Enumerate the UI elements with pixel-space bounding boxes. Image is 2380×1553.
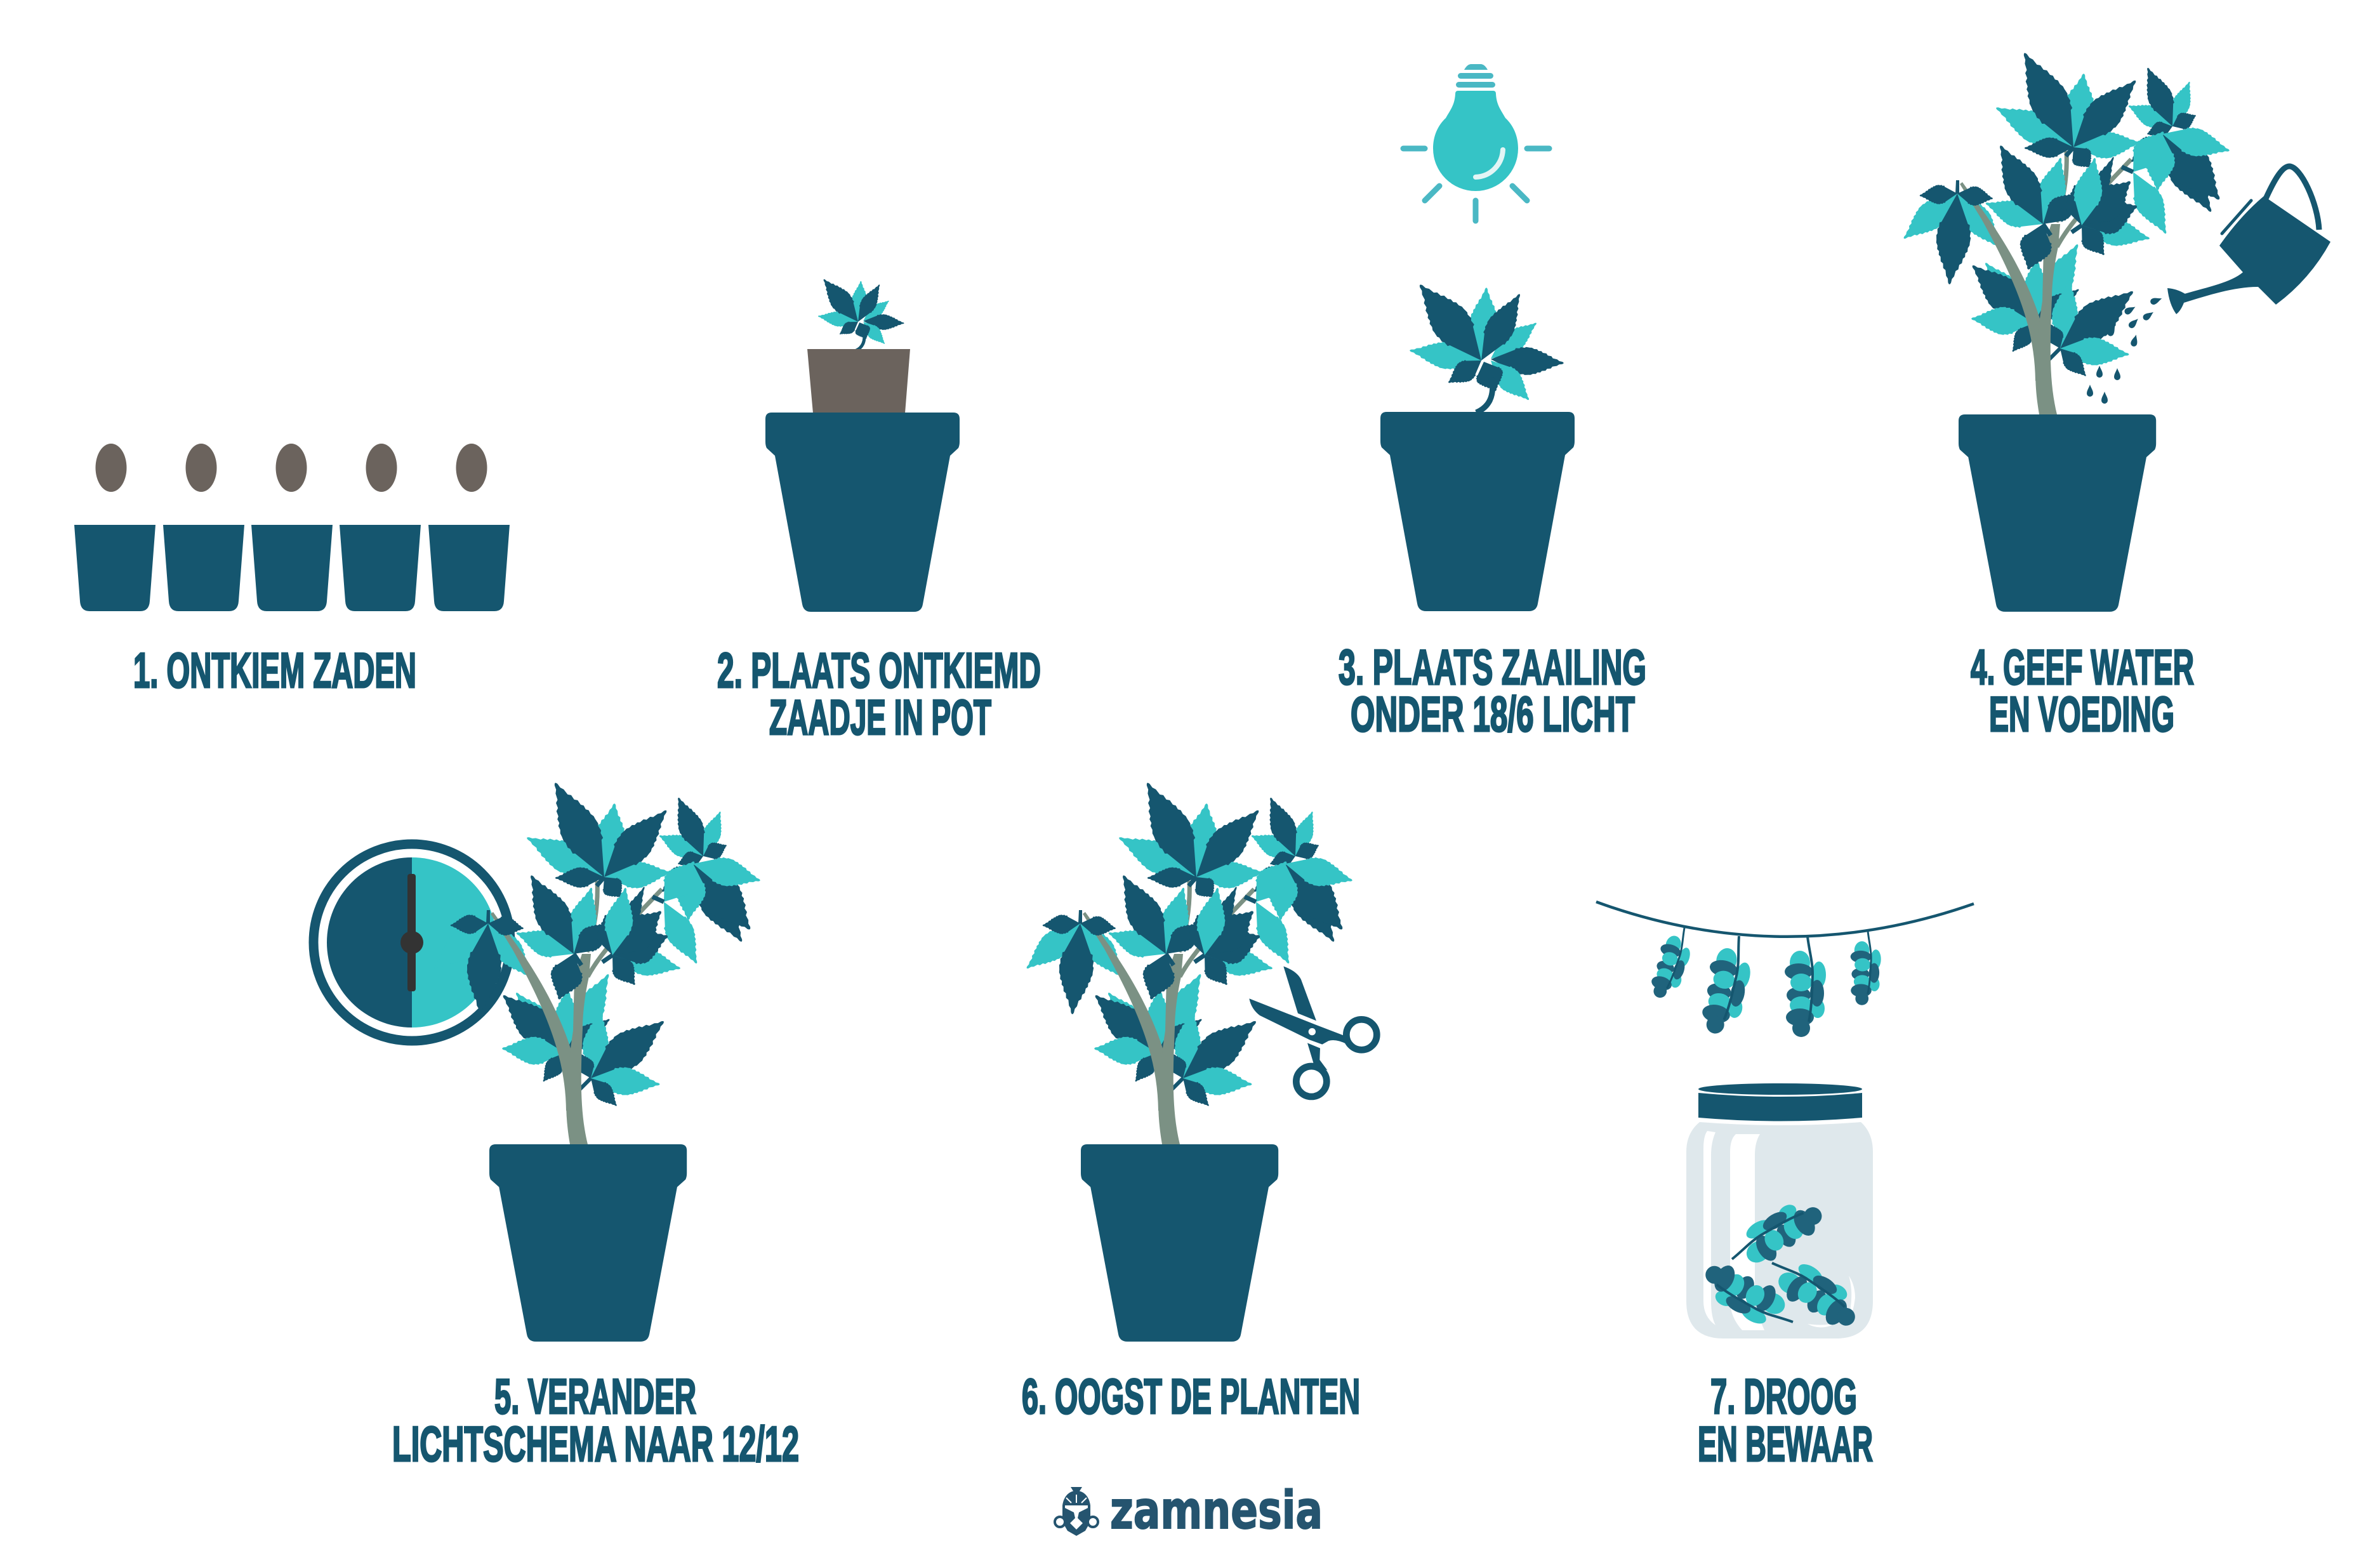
label step 5: LICHTSCHEMA NAAR 12/12: [392, 1416, 799, 1472]
wordmark: zamnesia: [1110, 1481, 1323, 1541]
jar: [1686, 1083, 1873, 1338]
large pot: [765, 413, 960, 612]
seedling: [816, 272, 904, 351]
water drops: [2087, 296, 2163, 404]
label step 3: 3. PLAATS ZAAILING: [1339, 639, 1646, 695]
jar highlights: [1703, 1131, 1855, 1330]
label step 5: 5. VERANDER: [494, 1368, 696, 1424]
buds in jar: [1695, 1191, 1867, 1338]
jar lid: [1698, 1083, 1862, 1095]
step 5: change light schedule: [314, 774, 765, 1342]
label step 6: 6. OOGST DE PLANTEN: [1022, 1368, 1360, 1424]
icon: timer clock: [314, 844, 510, 1041]
pot: [489, 1144, 687, 1342]
plant: [426, 774, 765, 1144]
seedling: [1405, 272, 1564, 413]
step 4: water and feed: [1895, 44, 2330, 612]
logo: zamnesia: [1055, 1481, 1323, 1541]
icon: mask: [1055, 1487, 1098, 1536]
label step 7: [1698, 1368, 1873, 1472]
icon: watering can: [2167, 166, 2330, 314]
label step 3: ONDER 18/6 LICHT: [1351, 686, 1635, 742]
seeds: [95, 444, 487, 492]
pot: [1081, 1144, 1278, 1342]
icon: light bulb: [1403, 64, 1549, 221]
step 7: dry and store: [1596, 902, 1974, 1338]
icon: scissors: [1249, 967, 1377, 1097]
plant: [1018, 774, 1358, 1144]
label step 2: ZAADJE IN POT: [769, 689, 991, 745]
cups: [74, 525, 510, 611]
label step 4: EN VOEDING: [1989, 686, 2174, 742]
pot: [1959, 414, 2156, 612]
pot: [1380, 412, 1575, 611]
step 1: seeds and cups: [74, 444, 510, 611]
drying line: [1596, 902, 1974, 937]
label step 2: [717, 642, 1041, 745]
label step 7: EN BEWAAR: [1698, 1416, 1873, 1472]
step 6: harvest: [1018, 774, 1377, 1342]
small brown pot: [807, 349, 910, 413]
label step 2: 2. PLAATS ONTKIEMD: [717, 642, 1041, 698]
step 3: seedling under 18/6 light: [1380, 64, 1575, 611]
jar glass: [1686, 1122, 1873, 1338]
label step 1: 1. ONTKIEM ZADEN: [133, 642, 416, 698]
plant: [1895, 44, 2235, 414]
label step 3: [1339, 639, 1646, 742]
step 2: germinated seed in pot: [765, 272, 960, 612]
label step 4: [1971, 639, 2194, 742]
label step 4: 4. GEEF WATER: [1971, 639, 2194, 695]
label step 7: 7. DROOG: [1710, 1368, 1857, 1424]
hanging buds: [1646, 923, 1881, 1038]
label step 5: [392, 1368, 799, 1472]
